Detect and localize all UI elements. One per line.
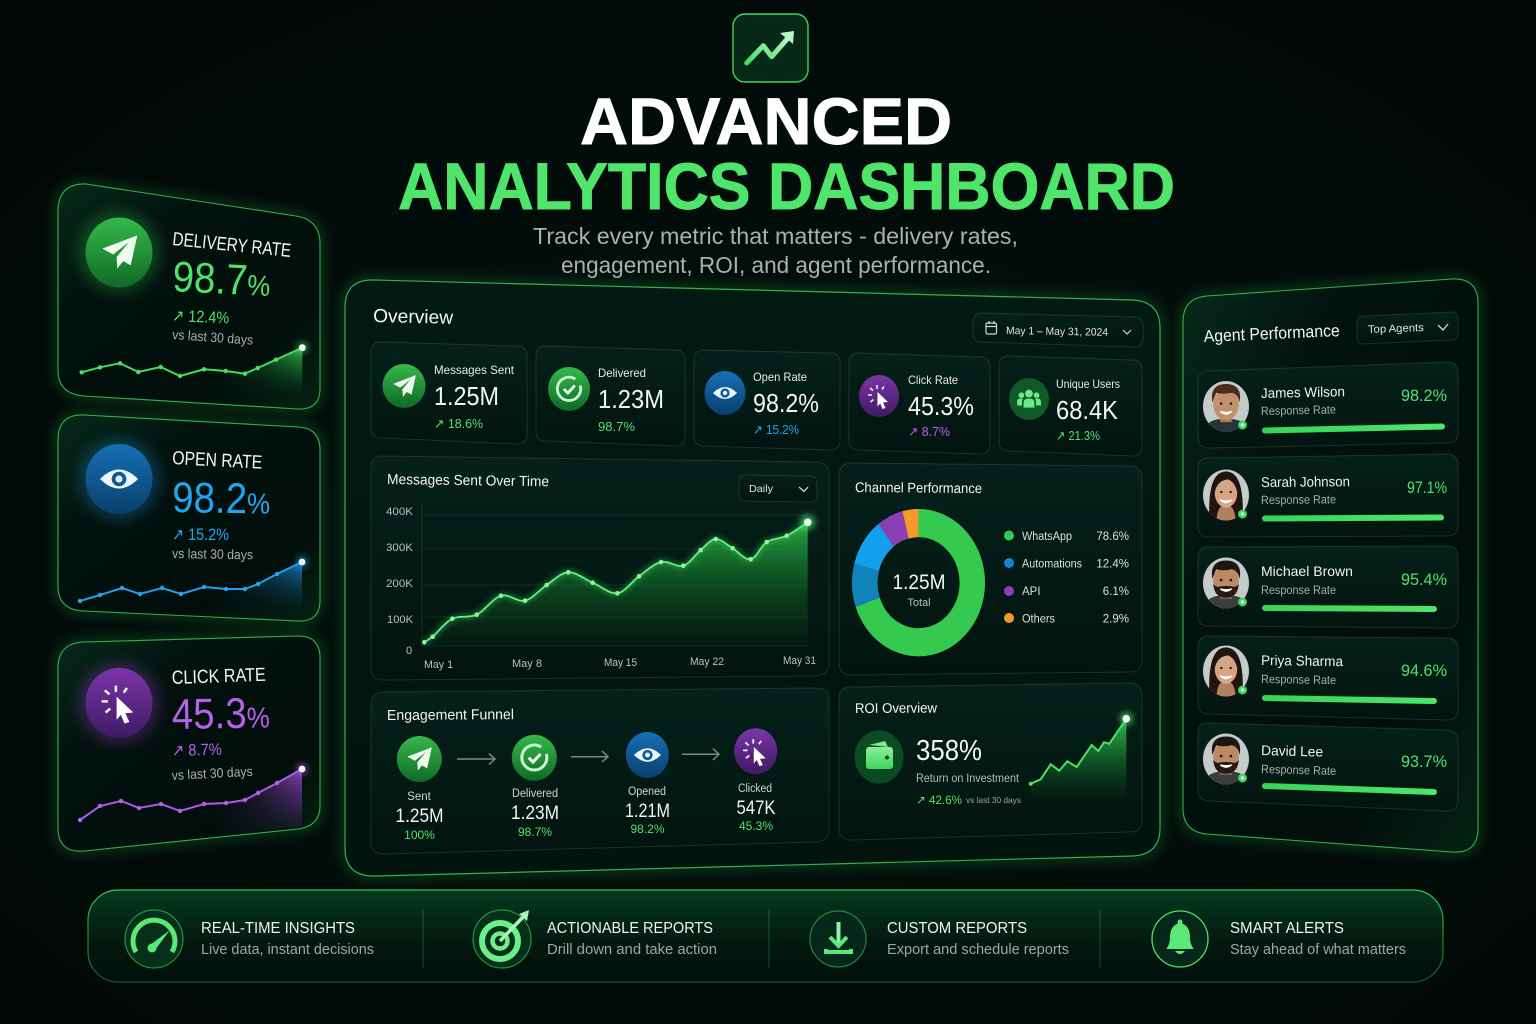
progress bar (1265, 426, 1442, 430)
step: delivered: 98.7% (518, 825, 552, 839)
dropdown: top agents: Top Agents (1368, 322, 1425, 336)
change: ↗ 8.7% (172, 741, 222, 760)
area and line (422, 514, 816, 646)
feature: smart alerts: Stay ahead of what matters (1230, 941, 1406, 958)
panel: delivery rate (58, 184, 320, 409)
icon: check (548, 367, 590, 411)
feature: actionable reports: ACTIONABLE REPORTS (547, 920, 713, 937)
panel: overview (345, 280, 1160, 876)
agent: james wilson: James Wilson (1261, 383, 1345, 401)
heading: Messages Sent Over Time (387, 472, 549, 490)
icon: paper plane (77, 210, 161, 294)
value: 98.2% (172, 474, 271, 524)
value: 45.3% (171, 689, 270, 739)
dropdown: top agents (1357, 312, 1458, 344)
agent: priya sharma: Response Rate (1261, 672, 1336, 687)
y axis labels: 0 (406, 645, 412, 657)
title: ADVANCED (580, 84, 952, 158)
heading: Engagement Funnel (387, 707, 514, 724)
stat card: delivered: Delivered (598, 366, 646, 380)
icon: download (810, 911, 866, 967)
stat card: open rate: 98.2% (753, 388, 819, 418)
arrow (571, 751, 608, 762)
stat card: messages sent: 1.25M (434, 381, 499, 411)
heading: Channel Performance (855, 479, 982, 496)
feature: custom reports: Export and schedule reports (887, 941, 1069, 958)
agent: david lee (1198, 723, 1458, 811)
step: delivered: 1.23M (511, 803, 559, 824)
change: ↗ 12.4% (172, 307, 230, 327)
agent: michael brown: 95.4% (1401, 571, 1447, 589)
stat card: messages sent (371, 342, 527, 444)
agent: michael brown: Response Rate (1261, 583, 1336, 597)
caption: Return on Investment (916, 773, 1020, 785)
panel: channel performance (839, 463, 1142, 675)
legend: WhatsApp (1022, 531, 1072, 543)
sparkline (80, 342, 308, 396)
dropdown: daily: Daily (749, 483, 774, 495)
stat card: click rate: 45.3% (908, 391, 974, 421)
stat card: open rate: ↗ 15.2% (753, 422, 799, 437)
progress bar (1265, 786, 1434, 792)
x axis labels: May 1 (424, 659, 453, 671)
label: CLICK RATE (171, 665, 266, 689)
agent: james wilson (1198, 362, 1458, 448)
step: clicked (734, 728, 777, 833)
value: 98.7% (171, 253, 272, 306)
arrow (457, 754, 495, 764)
donut centre total: Total (907, 597, 931, 609)
change: ↗ 42.6% (916, 793, 962, 807)
change: ↗ 15.2% (172, 526, 229, 544)
stat card: messages sent: Messages Sent (434, 363, 515, 377)
x axis labels: May 15 (604, 657, 637, 669)
icon: users (1009, 378, 1049, 420)
title: ANALYTICS DASHBOARD (398, 149, 1175, 223)
icon: paper plane (382, 364, 426, 408)
step: sent (396, 736, 444, 842)
arrow (682, 748, 719, 760)
step: clicked: Clicked (738, 783, 772, 795)
icon: bell (1152, 911, 1208, 967)
step: sent: 1.25M (396, 806, 444, 827)
step: delivered: Delivered (512, 788, 558, 800)
icon: cursor (859, 375, 899, 417)
legend: Automations (1022, 558, 1082, 570)
subtitle: Track every metric that matters - delivery rates, (533, 223, 1018, 249)
legend: 2.9% (1103, 614, 1129, 626)
legend: 12.4% (1096, 558, 1129, 570)
x axis labels: May 22 (690, 656, 724, 668)
donut chart (865, 523, 972, 642)
donut centre total: 1.25M (892, 571, 946, 594)
step: delivered (511, 735, 559, 839)
stat card: messages sent: ↗ 18.6% (434, 416, 483, 431)
feature: real-time insights: REAL-TIME INSIGHTS (201, 920, 355, 937)
stat card: open rate: Open Rate (753, 370, 807, 384)
legend: 6.1% (1103, 586, 1129, 598)
stat card: delivered: 1.23M (598, 384, 664, 414)
agent: david lee: 93.7% (1401, 753, 1447, 771)
subtitle: engagement, ROI, and agent performance. (561, 252, 991, 278)
step: sent: Sent (407, 791, 432, 803)
stat card: delivered (536, 346, 685, 446)
comparison note: vs last 30 days (966, 795, 1021, 805)
caption: vs last 30 days (172, 546, 253, 562)
feature: custom reports (810, 911, 1069, 967)
sparkline (78, 760, 312, 830)
feature: actionable reports: Drill down and take action (547, 941, 717, 958)
agent: sarah johnson: Response Rate (1261, 492, 1336, 507)
x axis labels: May 31 (783, 655, 816, 667)
feature: smart alerts (1152, 911, 1406, 967)
agent: david lee: Response Rate (1261, 762, 1337, 778)
stat card: click rate: ↗ 8.7% (908, 424, 950, 439)
icon: gauge (125, 910, 183, 968)
step: clicked: 45.3% (739, 819, 773, 833)
agent: sarah johnson: Sarah Johnson (1261, 473, 1350, 490)
step: clicked: 547K (736, 798, 776, 819)
panel: engagement funnel (371, 688, 829, 854)
x axis labels: May 8 (512, 658, 542, 670)
panel: roi overview (839, 683, 1142, 840)
feature: custom reports: CUSTOM REPORTS (887, 920, 1027, 937)
step: opened: Opened (628, 786, 666, 798)
agent: priya sharma: 94.6% (1401, 662, 1447, 680)
icon: wallet (854, 730, 904, 784)
panel: open rate (58, 415, 320, 621)
y axis labels (386, 506, 414, 657)
label: DELIVERY RATE (171, 229, 292, 262)
legend (1004, 530, 1129, 626)
title (398, 84, 1175, 223)
step: sent: 100% (404, 828, 435, 842)
y axis labels: 400K (386, 506, 414, 518)
panel: bottom feature bar (88, 890, 1443, 982)
legend: API (1022, 586, 1041, 598)
avatar (1202, 381, 1250, 434)
y axis labels: 300K (386, 542, 414, 554)
donut centre total (892, 571, 946, 609)
caption: vs last 30 days (171, 764, 253, 783)
feature: real-time insights (125, 910, 374, 968)
sparkline (1029, 712, 1133, 800)
x axis labels (424, 655, 816, 671)
stat card: open rate (694, 350, 840, 450)
heading: overview: Overview (373, 306, 454, 329)
agent: james wilson: 98.2% (1401, 387, 1447, 405)
heading: Agent Performance (1203, 321, 1340, 346)
icon: target (473, 910, 531, 968)
date picker: May 1 – May 31, 2024 (1006, 325, 1108, 339)
agent: sarah johnson: 97.1% (1407, 479, 1447, 497)
avatar (1202, 646, 1250, 698)
icon: eye (704, 371, 746, 415)
y axis labels: 100K (387, 614, 414, 626)
panel: agent performance (1183, 279, 1478, 852)
agent: sarah johnson (1198, 454, 1458, 537)
avatar (1202, 734, 1250, 786)
icon: eye (77, 437, 161, 521)
subtitle (533, 223, 1018, 278)
value: 358% (916, 735, 982, 767)
dropdown: daily (739, 475, 817, 502)
progress bar (1265, 518, 1441, 519)
label: OPEN RATE (172, 448, 263, 474)
step: opened (625, 732, 670, 836)
stat card: delivered: 98.7% (598, 419, 635, 434)
progress bar (1265, 698, 1434, 701)
panel: click rate (58, 636, 320, 851)
panel: messages over time line chart (371, 456, 829, 680)
legend: Others (1022, 614, 1055, 626)
sparkline (78, 556, 308, 610)
avatar (1202, 558, 1250, 610)
stat card: unique users (999, 356, 1142, 456)
step: opened: 1.21M (625, 801, 670, 822)
progress bar (1265, 608, 1434, 609)
agent: priya sharma (1198, 636, 1458, 720)
heading: ROI Overview (855, 700, 938, 716)
stat card: unique users: Unique Users (1056, 377, 1120, 391)
icon: trending chart badge (733, 14, 808, 82)
caption: vs last 30 days (172, 327, 254, 348)
date picker (973, 313, 1143, 347)
agent: michael brown (1198, 546, 1458, 628)
stat card: unique users: ↗ 21.3% (1056, 428, 1100, 443)
agent: michael brown: Michael Brown (1261, 563, 1353, 579)
step: opened: 98.2% (630, 822, 665, 836)
agent: david lee: David Lee (1261, 742, 1324, 760)
feature: real-time insights: Live data, instant decisions (201, 941, 374, 958)
feature: smart alerts: SMART ALERTS (1230, 920, 1344, 937)
agent: james wilson: Response Rate (1261, 402, 1336, 418)
y axis labels: 200K (386, 578, 414, 590)
stat card: click rate (849, 353, 990, 454)
icon: cursor (77, 661, 161, 745)
stat card: click rate: Click Rate (908, 373, 958, 387)
stat card: unique users: 68.4K (1056, 395, 1119, 425)
agent: priya sharma: Priya Sharma (1261, 652, 1343, 669)
feature: actionable reports (473, 910, 717, 968)
avatar (1202, 470, 1250, 522)
legend: 78.6% (1096, 531, 1129, 543)
